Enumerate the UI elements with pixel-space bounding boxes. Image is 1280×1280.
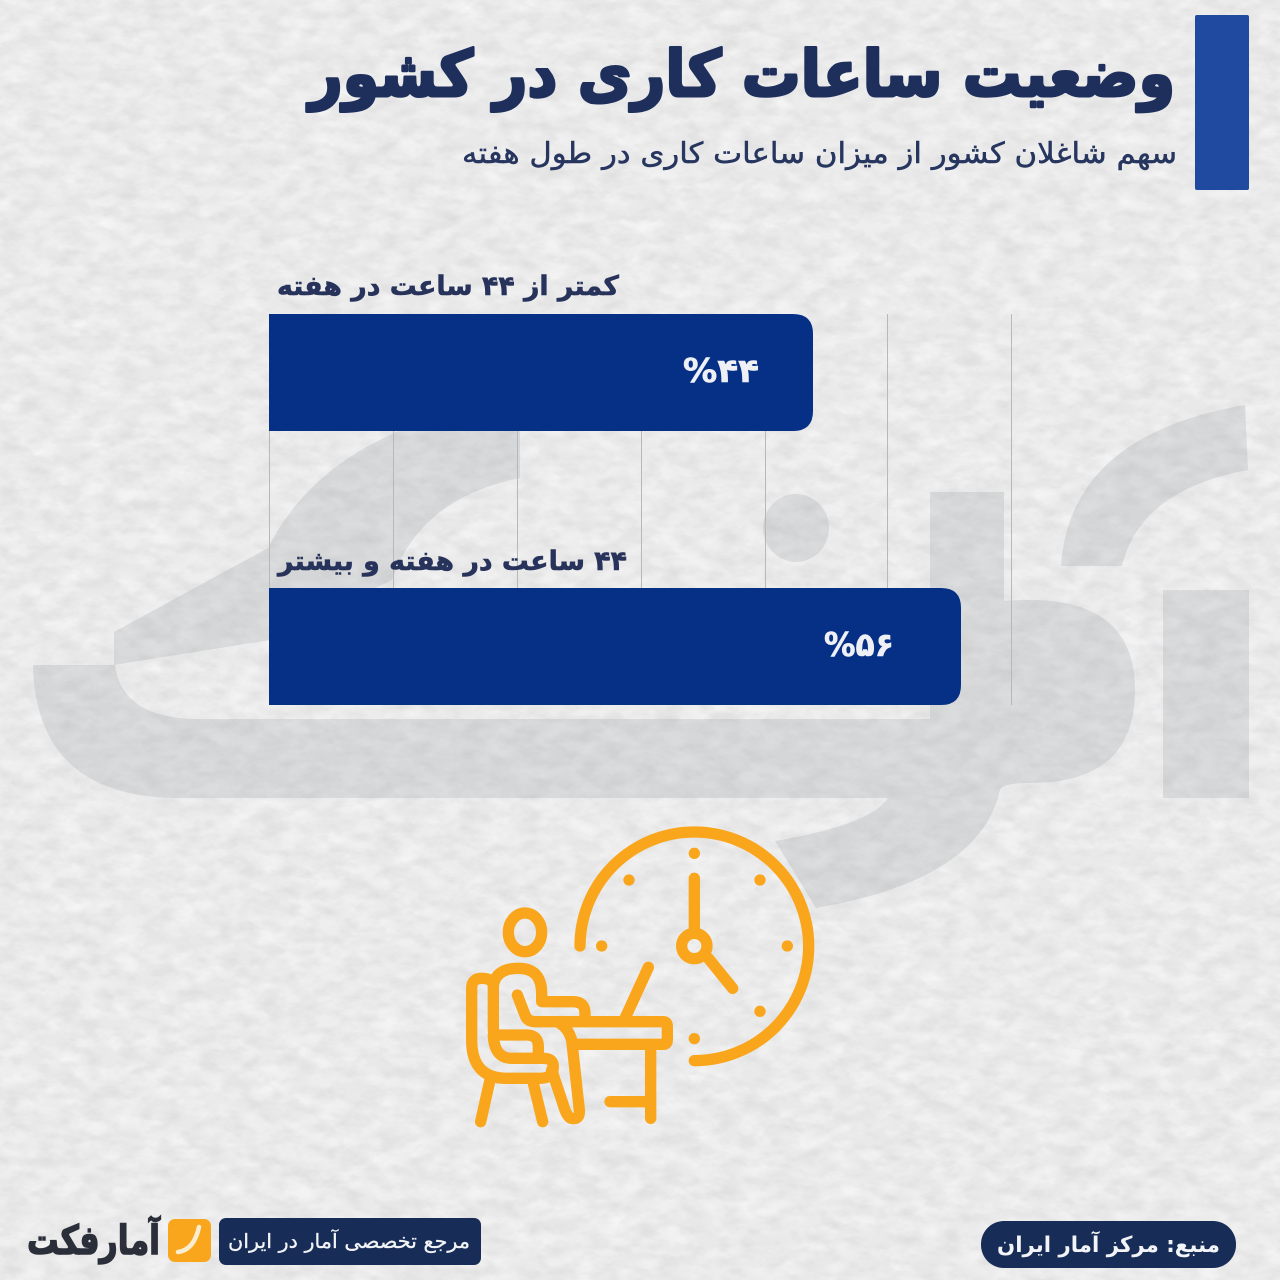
bar chart (269, 271, 1012, 705)
value: 44 percent: %۴۴ (683, 351, 759, 390)
icon: person (472, 913, 667, 1122)
value: 56 percent: %۵۶ (824, 625, 894, 664)
title: وضعیت ساعات کاری در کشور (306, 38, 1175, 112)
title accent bar (1195, 15, 1249, 190)
logo mark (168, 1219, 211, 1262)
bar: 44 percent (269, 314, 813, 431)
watermark logo (33, 400, 1249, 908)
icon: clock (580, 832, 809, 1061)
source badge (981, 1221, 1236, 1268)
tagline badge (219, 1218, 481, 1265)
source badge: منبع: مرکز آمار ایران (997, 1230, 1220, 1258)
label: under 44 hours: کمتر از ۴۴ ساعت در هفته (277, 271, 619, 302)
icon: person working at desk with clock (472, 832, 809, 1122)
tagline badge: مرجع تخصصی آمار در ایران (228, 1228, 470, 1253)
logo (27, 1215, 211, 1264)
bar: 56 percent (269, 588, 961, 705)
subtitle: سهم شاغلان کشور از میزان ساعات کاری در طول هفته (462, 136, 1177, 171)
logo wordmark: آمارفکت (27, 1215, 161, 1264)
label: 44 hours and more: ۴۴ ساعت در هفته و بیشتر (276, 546, 627, 577)
